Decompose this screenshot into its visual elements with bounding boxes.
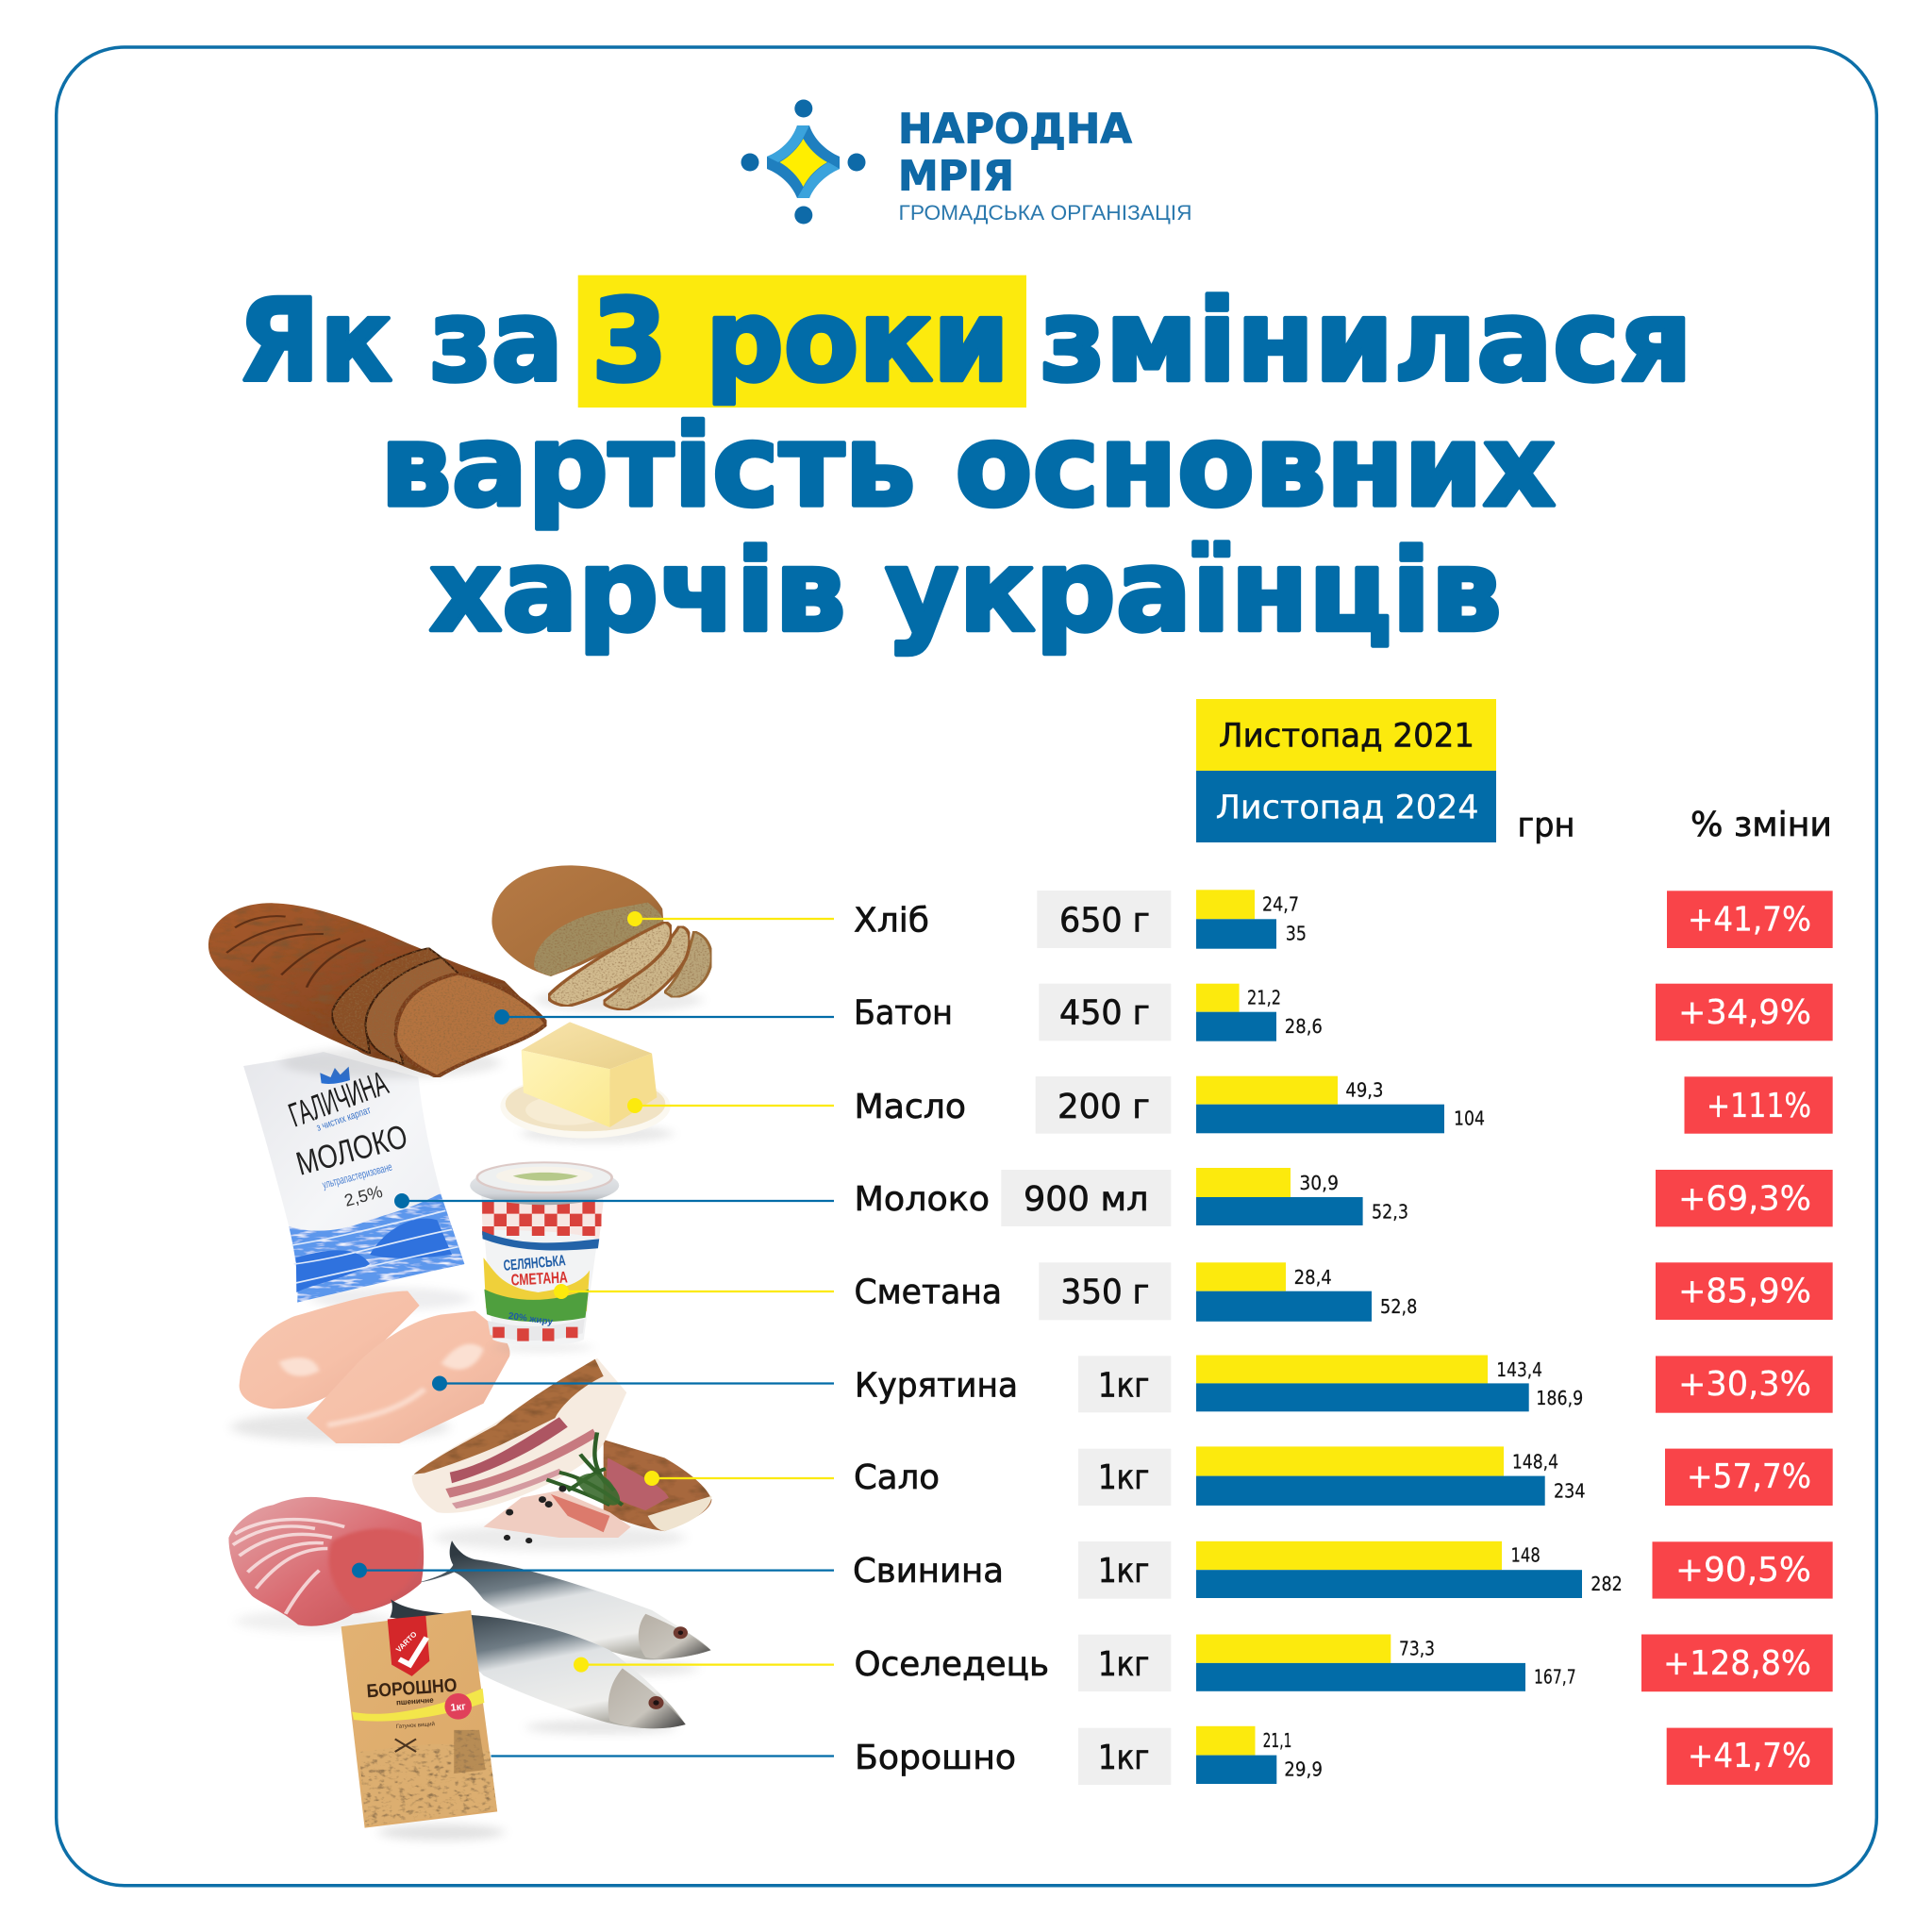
package size <box>1039 984 1171 1041</box>
product name: Молоко <box>855 1180 990 1219</box>
title <box>238 275 1692 658</box>
percent change <box>1656 1356 1833 1413</box>
food: flour pack: пшеничне <box>396 1696 434 1707</box>
title line 1: 3 роки <box>591 276 1009 408</box>
leader: sour cream <box>554 1284 834 1299</box>
price bars <box>1196 1634 1576 1691</box>
package size <box>1078 1449 1171 1506</box>
food: flour pack: Гатунок вищий <box>396 1721 435 1730</box>
product name: Оселедець <box>855 1645 1049 1684</box>
price bars: 28,4 <box>1294 1266 1332 1289</box>
percent change <box>1656 1262 1833 1320</box>
food: milk bag: ультрапастеризоване <box>321 1160 393 1191</box>
percent change <box>1641 1634 1833 1691</box>
percent change: +111% <box>1707 1087 1811 1125</box>
food: salo <box>412 1358 711 1551</box>
leader: butter <box>627 1098 834 1113</box>
product name: Курятина <box>855 1367 1018 1406</box>
percent change: +85,9% <box>1678 1273 1811 1311</box>
food: round bread <box>491 865 711 1012</box>
food: milk bag: МОЛОКО <box>292 1118 411 1183</box>
food: milk bag: ГАЛИЧИНА <box>284 1063 392 1135</box>
food: pork <box>228 1497 424 1632</box>
percent change: +128,8% <box>1663 1644 1811 1683</box>
price bars: 49,3 <box>1345 1078 1383 1101</box>
percent change <box>1685 1076 1833 1134</box>
percent change: +90,5% <box>1675 1551 1811 1590</box>
product name: Свинина <box>853 1552 1004 1591</box>
percent change: +69,3% <box>1678 1179 1811 1219</box>
product name: Хліб <box>854 902 929 941</box>
title line 3: харчів українців <box>429 526 1502 658</box>
price bars: 35 <box>1286 922 1307 944</box>
legend <box>1196 699 1496 842</box>
price bars <box>1196 890 1307 949</box>
row: chicken <box>855 1355 1833 1413</box>
food: butter on plate <box>500 1022 673 1143</box>
food: herring, lower <box>390 1599 686 1734</box>
row: bread <box>854 890 1833 949</box>
price bars: 21,2 <box>1247 986 1281 1008</box>
row: sour cream <box>855 1262 1833 1322</box>
column header: currency: грн <box>1517 806 1575 844</box>
leader: bread <box>627 911 834 926</box>
food: sour cream cup: СМЕТАНА <box>510 1268 568 1290</box>
package size <box>1078 1635 1171 1691</box>
package size <box>1001 1170 1171 1226</box>
legend: November 2024 <box>1196 771 1496 842</box>
food: sour cream cup: СЕЛЯНСЬКА <box>503 1253 567 1274</box>
row: milk <box>855 1168 1833 1226</box>
food: herring, upper <box>416 1541 711 1675</box>
leader: pork <box>352 1563 834 1578</box>
logo wordmark <box>898 106 1192 225</box>
package size: 1кг <box>1098 1645 1149 1684</box>
package size: 900 мл <box>1024 1180 1149 1219</box>
title line 1 <box>238 276 1692 408</box>
price bars <box>1196 1446 1585 1506</box>
price bars: 29,9 <box>1284 1758 1323 1781</box>
product name: Батон <box>854 994 953 1033</box>
price bars: 73,3 <box>1399 1637 1435 1659</box>
product name: Масло <box>855 1088 966 1126</box>
package size: 650 г <box>1059 902 1150 941</box>
row: butter <box>855 1076 1833 1134</box>
price bars <box>1196 1541 1623 1598</box>
logo <box>741 100 1192 225</box>
price bars <box>1196 1726 1323 1784</box>
percent change: +57,7% <box>1687 1457 1811 1496</box>
leader: herring <box>574 1657 834 1673</box>
price bars <box>1196 1355 1583 1411</box>
package size: 1кг <box>1098 1739 1149 1777</box>
row: pork <box>853 1541 1833 1599</box>
legend: November 2021: Листопад 2021 <box>1219 718 1474 756</box>
product name: Сало <box>854 1458 940 1497</box>
price bars: 30,9 <box>1299 1172 1339 1194</box>
row: flour <box>855 1726 1833 1785</box>
price bars <box>1196 1076 1485 1133</box>
column header: percent change: % зміни <box>1690 806 1832 844</box>
price bars: 52,8 <box>1380 1295 1417 1318</box>
price bars <box>1196 1262 1417 1322</box>
food: sliced loaf <box>208 903 546 1078</box>
food: flour pack: VARTO <box>394 1630 419 1654</box>
percent change: +34,9% <box>1678 993 1811 1032</box>
percent change <box>1667 891 1833 948</box>
logo wordmark: НАРОДНА <box>898 106 1132 154</box>
legend: November 2024: Листопад 2024 <box>1216 790 1479 827</box>
product name: Борошно <box>855 1739 1016 1777</box>
price bars: 52,3 <box>1372 1200 1408 1223</box>
logo wordmark: ГРОМАДСЬКА ОРГАНІЗАЦІЯ <box>898 201 1192 225</box>
food: milk bag: з чистих карпат <box>315 1105 373 1134</box>
package size <box>1036 1076 1171 1134</box>
percent change <box>1665 1449 1833 1506</box>
legend: November 2021 <box>1196 699 1496 771</box>
product name: Сметана <box>855 1274 1002 1312</box>
percent change <box>1656 1170 1833 1226</box>
food: sour cream cup: 20% жиру <box>508 1311 554 1327</box>
percent change: +30,3% <box>1678 1365 1811 1404</box>
leader lines <box>352 911 834 1757</box>
package size: 1кг <box>1098 1552 1149 1591</box>
package size: 350 г <box>1060 1274 1149 1312</box>
price bars: 104 <box>1454 1107 1485 1129</box>
price bars: 234 <box>1554 1479 1585 1502</box>
leader: milk <box>394 1193 834 1208</box>
title line 1: Як за <box>238 276 563 408</box>
percent change <box>1667 1728 1833 1785</box>
package size: 1кг <box>1098 1458 1149 1497</box>
food: chicken breasts <box>231 1291 510 1443</box>
leader: chicken <box>432 1375 834 1391</box>
percent change <box>1656 984 1833 1041</box>
price bars: 282 <box>1591 1573 1623 1595</box>
price bars: 167,7 <box>1534 1666 1576 1689</box>
package size <box>1078 1728 1171 1785</box>
row: salo <box>854 1446 1833 1506</box>
row: baton <box>854 984 1833 1041</box>
price bars: 148 <box>1511 1544 1541 1567</box>
title line 1: змінилася <box>1040 276 1692 408</box>
package size: 450 г <box>1059 994 1150 1033</box>
title highlight <box>578 275 1026 408</box>
package size <box>1037 891 1171 948</box>
row: herring <box>855 1634 1833 1691</box>
food: flour pack <box>341 1610 505 1840</box>
price bars: 21,1 <box>1263 1729 1291 1752</box>
logo mark <box>741 100 866 225</box>
leader: flour <box>491 1755 834 1757</box>
logo wordmark: МРІЯ <box>898 153 1014 201</box>
leader: salo <box>644 1471 834 1486</box>
food: milk bag: 2,5% <box>342 1182 385 1210</box>
percent change: +41,7% <box>1688 1737 1811 1775</box>
price bars <box>1196 984 1323 1041</box>
package size <box>1078 1356 1171 1412</box>
food: flour pack: 1кг <box>450 1701 467 1714</box>
food: flour pack: БОРОШНО <box>366 1675 458 1702</box>
price bars: 148,4 <box>1512 1451 1558 1474</box>
food: milk bag <box>243 1052 471 1310</box>
percent change: +41,7% <box>1688 901 1811 940</box>
price bars: 143,4 <box>1496 1358 1542 1381</box>
package size: 1кг <box>1098 1367 1149 1406</box>
percent change <box>1653 1541 1833 1599</box>
food: sour cream cup <box>470 1162 619 1353</box>
price bars <box>1196 1168 1408 1225</box>
leader: baton <box>494 1009 834 1024</box>
price bars: 24,7 <box>1262 893 1299 916</box>
price bars: 186,9 <box>1536 1387 1583 1409</box>
package size: 200 г <box>1058 1088 1150 1126</box>
title line 2: вартість основних <box>380 402 1556 532</box>
price bars: 28,6 <box>1285 1015 1323 1038</box>
package size <box>1039 1262 1171 1320</box>
food photos <box>208 865 711 1840</box>
package size <box>1078 1541 1171 1599</box>
